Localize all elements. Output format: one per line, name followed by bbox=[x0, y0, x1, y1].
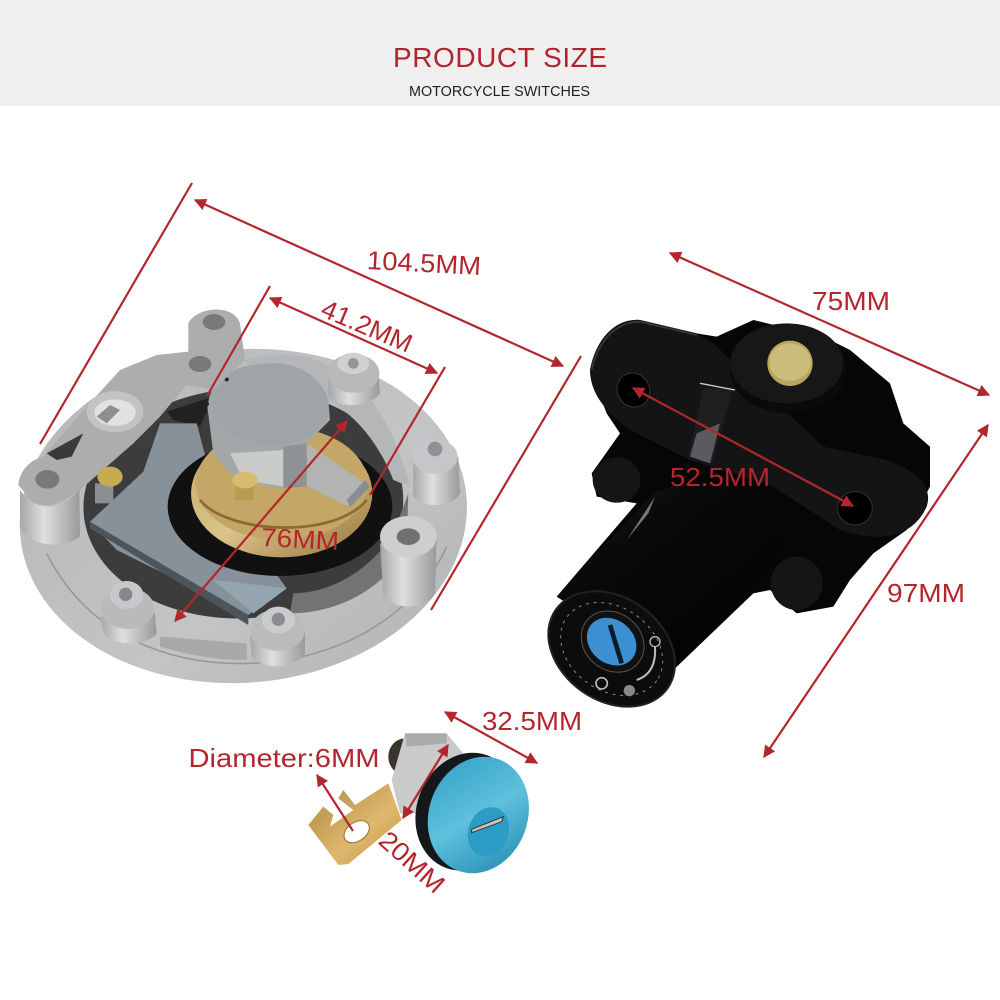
bracket plate shadow bits bbox=[167, 397, 213, 427]
bracket left post bbox=[20, 490, 80, 545]
plate holes bbox=[611, 367, 872, 525]
product: fuel cap bbox=[6, 310, 481, 702]
title: PRODUCT SIZE bbox=[393, 42, 607, 73]
key cylinder bbox=[557, 483, 785, 670]
face symbols bbox=[596, 678, 607, 689]
label 76MM: 76MM bbox=[260, 522, 340, 556]
cap body bbox=[207, 380, 330, 488]
dimension labels bbox=[188, 245, 965, 899]
label 97MM: 97MM bbox=[887, 578, 965, 608]
key slot bbox=[569, 599, 656, 685]
bracket slot bbox=[47, 433, 83, 460]
pin cap bbox=[730, 323, 847, 413]
rubber seal bbox=[168, 437, 392, 576]
silver barrel bbox=[392, 733, 463, 813]
label 52.5MM: 52.5MM bbox=[670, 462, 770, 492]
outer silver ring bbox=[6, 330, 481, 702]
label 32.5MM: 32.5MM bbox=[482, 706, 582, 736]
lower lugs bbox=[593, 457, 823, 610]
bracket holes bbox=[35, 314, 225, 489]
metal mounting plate bbox=[90, 423, 287, 615]
label 41.2MM: 41.2MM bbox=[317, 293, 417, 359]
inner well bbox=[78, 380, 409, 627]
bracket hole square bbox=[87, 391, 143, 432]
brass base bbox=[191, 429, 372, 557]
product: small key lock bbox=[308, 733, 545, 888]
label 104.5MM: 104.5MM bbox=[366, 245, 482, 281]
blue cap bbox=[412, 742, 545, 888]
keyhole bbox=[461, 801, 516, 862]
brass screw bbox=[232, 472, 258, 500]
cap wing bbox=[307, 444, 370, 507]
cap top face bbox=[208, 363, 329, 445]
spring bbox=[388, 738, 422, 775]
label diameter: Diameter:6MM bbox=[188, 743, 380, 773]
dimension lines bbox=[40, 183, 989, 831]
mounting bolts bbox=[100, 353, 460, 666]
subtitle: MOTORCYCLE SWITCHES bbox=[409, 84, 590, 100]
header band bbox=[0, 0, 1000, 106]
switch silhouette bbox=[557, 320, 930, 670]
highlights bbox=[688, 388, 733, 463]
brass screw left bbox=[95, 467, 123, 503]
label 75MM: 75MM bbox=[812, 286, 890, 316]
gold bracket bbox=[308, 783, 402, 865]
top bracket arm bbox=[18, 310, 245, 505]
product: ignition switch bbox=[526, 320, 930, 731]
mounting plate bbox=[590, 320, 928, 537]
lock face bbox=[526, 567, 697, 731]
label 20MM: 20MM bbox=[373, 825, 451, 899]
black gasket bbox=[399, 738, 534, 885]
